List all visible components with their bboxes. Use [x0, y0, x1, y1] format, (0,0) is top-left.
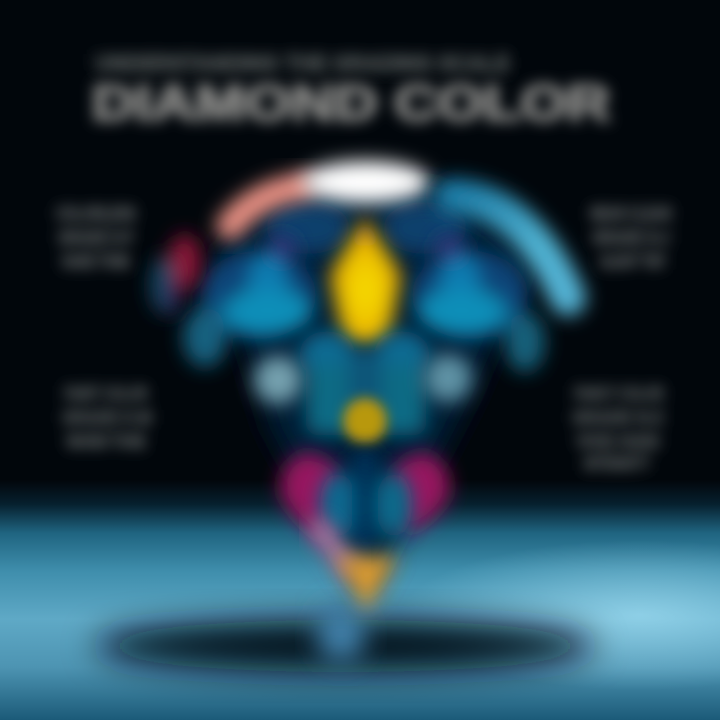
lower blue facets: [320, 450, 412, 555]
label: bottom left: FAINT COLOR: [64, 384, 148, 405]
diamond: [150, 161, 568, 612]
label: top right: SLIGHT TINT: [600, 252, 666, 273]
label: top right: GRADE G-J: [592, 228, 670, 249]
label: bottom left: [62, 384, 152, 453]
blue arc facet: [452, 196, 568, 298]
label: bottom right: GRADE N-Z: [572, 408, 664, 429]
subtitle: UNDERSTANDING THE GRADING SCALE: [95, 50, 510, 76]
label: top left: RARE TONE: [62, 252, 130, 273]
diamond body: [215, 185, 530, 600]
label: bottom right: VIVID HUES: [576, 432, 660, 453]
white table facet: [302, 161, 430, 203]
gold circle facet: [343, 398, 387, 444]
mauve lower facet: [320, 530, 350, 570]
pale side facets: [254, 354, 472, 404]
label: top right: [590, 204, 672, 273]
label: bottom right: [572, 384, 664, 475]
magenta facets: [280, 452, 450, 545]
label: top left: GRADE D-F: [58, 228, 134, 249]
floor surface: [0, 480, 720, 720]
floor shadow: [95, 620, 595, 672]
label: top left: [56, 204, 136, 273]
crown navy facets: [266, 202, 467, 254]
salmon arc facet: [230, 186, 304, 226]
label: top left: COLORLESS: [56, 204, 136, 225]
centre teal facets: [299, 331, 430, 435]
label: top right: NEAR CLEAR: [590, 204, 672, 225]
right side facets: [412, 236, 545, 372]
label: bottom right: FANCY COLOR: [574, 384, 664, 405]
gold culet: [336, 556, 398, 612]
yellow central gem: [329, 216, 402, 344]
label: bottom right: INTENSITY: [584, 454, 650, 475]
title block: [92, 50, 610, 131]
heading: DIAMOND COLOR: [92, 75, 610, 131]
label: bottom left: WARM TONE: [66, 432, 146, 453]
dark red facet: [150, 234, 201, 316]
diamond reflection stem: [318, 605, 364, 661]
label: bottom left: GRADE K-M: [62, 408, 152, 429]
left side facets: [183, 236, 316, 367]
